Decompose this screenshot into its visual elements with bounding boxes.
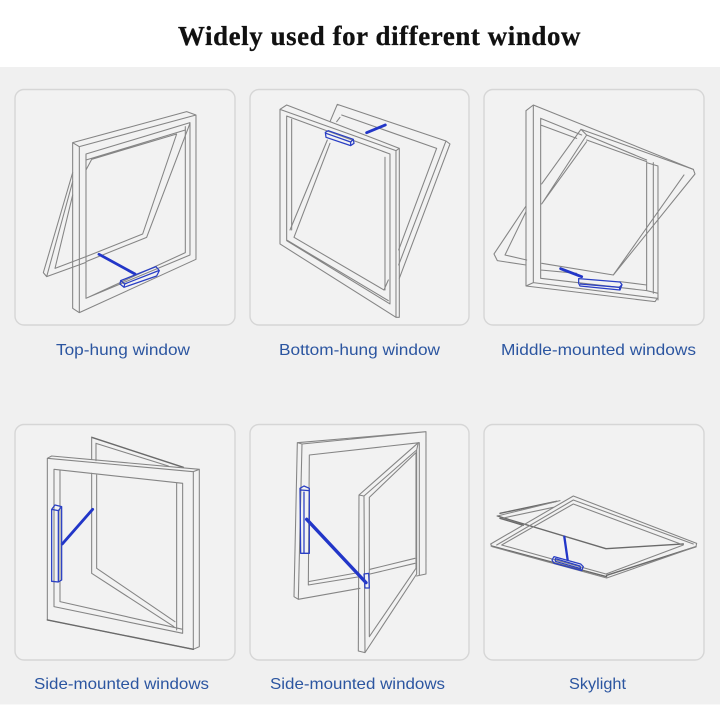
panel: bottom-hung window [250,90,469,359]
panel: side-mounted windows left [15,424,235,693]
label: top-hung window: Top-hung window [56,342,190,359]
title: Widely used for different window [178,21,581,51]
label: side-mounted windows right: Side-mounted windows [270,676,445,693]
icon: skylight window [491,496,697,578]
panel: skylight [484,424,704,693]
label: side-mounted windows left: Side-mounted windows [34,676,209,693]
label: skylight: Skylight [569,676,627,693]
icon: top-hung window [43,112,196,313]
icon: side-mounted window opening outward [294,432,426,653]
panel: side-mounted windows right [250,424,469,693]
panel: middle-mounted windows [484,90,704,359]
panel: top-hung window [15,90,235,359]
icon: middle-mounted windows [494,105,695,302]
label: middle-mounted windows: Middle-mounted windows [501,342,696,359]
icon: side-mounted window opening inward [47,437,199,649]
icon: bottom-hung window [280,104,450,317]
label: bottom-hung window: Bottom-hung window [279,342,440,359]
